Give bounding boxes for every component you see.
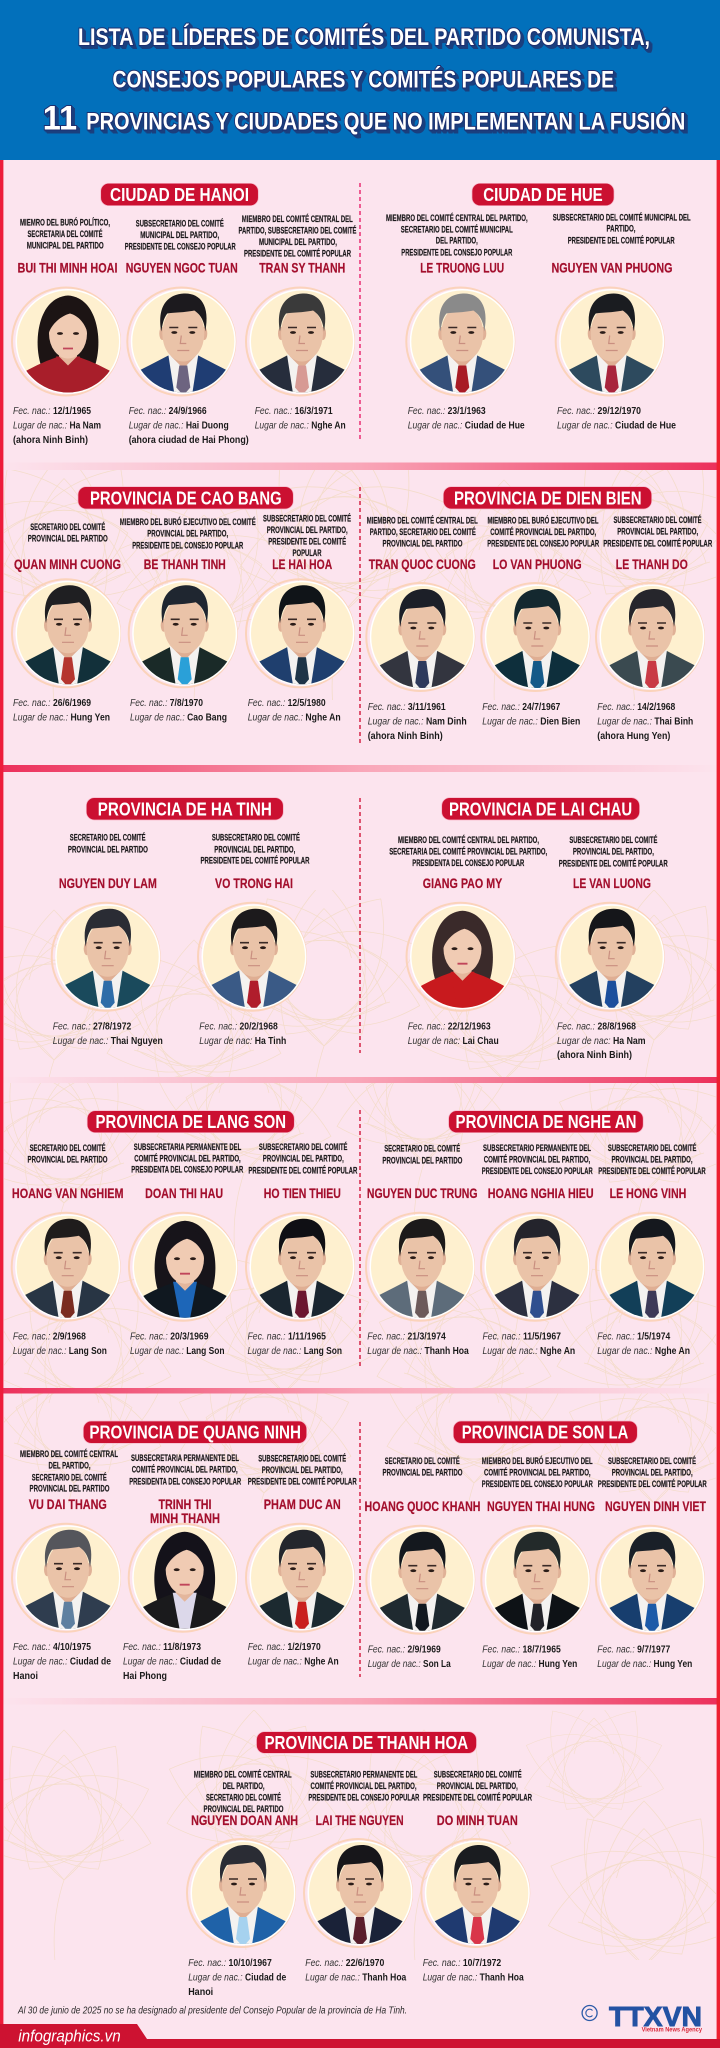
leader: Le Hai Hoa: Lugar de nac.: Nghe An: [248, 713, 341, 724]
portrait: [596, 583, 704, 691]
leader: Lai The Nguyen: LAI THE NGUYEN: [316, 1812, 404, 1828]
leader: Nguyen Ngoc Tuan: MUNICIPAL DEL PARTIDO,: [140, 230, 219, 241]
leader: Vo Trong Hai: [198, 832, 310, 1047]
portrait: [406, 288, 515, 396]
leader: Nguyen Dinh Viet: Lugar de nac.: Hung Yen: [597, 1659, 692, 1670]
leader: Tran Sy Thanh: Fec. nac.: 16/3/1971: [255, 406, 333, 417]
portrait: [129, 1213, 238, 1321]
panel: Provincia de Cao Bang: [12, 487, 354, 724]
leader: Le Van Luong: PROVINCIAL DEL PARTIDO,: [573, 847, 654, 858]
leader: Nguyen Doan Anh: [187, 1768, 298, 1998]
leader: Vu Dai Thang: VU DAI THANG: [29, 1496, 107, 1512]
leader: Nguyen Duc Trung: [366, 1143, 478, 1357]
leader: Le Hai Hoa: PRESIDENTE DEL COMITÉ: [268, 535, 347, 547]
leader: Nguyen Thai Hung: [481, 1455, 595, 1670]
leader: Nguyen Van Phuong: Fec. nac.: 29/12/1970: [557, 406, 641, 417]
leader: Le Thanh Do: Lugar de nac.: Thai Binh: [597, 716, 693, 727]
leader: Vu Dai Thang: DEL PARTIDO,: [48, 1461, 91, 1472]
leader: Trinh Thi Minh Thanh: COMITÉ PROVINCIAL DEL PARTIDO,: [132, 1464, 238, 1476]
panel: Ciudad de Hanoi: [12, 183, 357, 446]
leader: Le Truong Luu: PRESIDENTE DEL CONSEJO POPULAR: [401, 247, 512, 258]
panel: Provincia de Thanh Hoa: [187, 1732, 532, 1998]
leader: Doan Thi Hau: [129, 1142, 243, 1357]
leader: Bui Thi Minh Hoai: Fec. nac.: 12/1/1965: [13, 406, 91, 417]
leader: Lo Van Phuong: Lugar de nac.: Dien Bien: [482, 716, 580, 727]
heading: Ciudad de Hue: CIUDAD DE HUE: [483, 185, 603, 205]
leader: Giang Pao My: [389, 834, 547, 1047]
leader: Giang Pao My: Fec. nac.: 22/12/1963: [408, 1021, 491, 1032]
leader: Le Van Luong: Lugar de nac: Ha Nam: [557, 1036, 646, 1047]
leader: Le Hai Hoa: POPULAR: [292, 548, 322, 559]
portrait: [246, 1524, 354, 1632]
leader: Hoang Nghia Hieu: Fec. nac.: 11/5/1967: [482, 1331, 561, 1342]
leader: Le Hai Hoa: Fec. nac.: 12/5/1980: [248, 698, 326, 709]
panel: Provincia de Son La: [364, 1421, 707, 1670]
leader: Vo Trong Hai: VO TRONG HAI: [215, 875, 293, 891]
leader: Nguyen Ngoc Tuan: NGUYEN NGOC TUAN: [126, 260, 238, 276]
leader: Vo Trong Hai: PROVINCIAL DEL PARTIDO,: [214, 844, 296, 855]
leader: Le Thanh Do: Fec. nac.: 14/2/1968: [597, 702, 676, 713]
title: 11: [43, 100, 77, 138]
leader: Quan Minh Cuong: [12, 521, 121, 724]
leader: Pham Duc An: [246, 1452, 357, 1667]
leader: Giang Pao My: GIANG PAO MY: [423, 875, 503, 891]
heading: Provincia de Nghe An: PROVINCIA DE NGHE AN: [456, 1112, 636, 1132]
portrait: [12, 1524, 120, 1632]
leader: Le Hong Vinh: Fec. nac.: 1/5/1974: [597, 1331, 671, 1342]
portrait: [481, 1526, 590, 1634]
leader: Bui Thi Minh Hoai: MUNICIPAL DEL PARTIDO: [27, 240, 104, 252]
leader: Nguyen Dinh Viet: [596, 1455, 707, 1670]
leader: Hoang Van Nghiem: SECRETARIO DEL COMITÉ: [30, 1142, 106, 1154]
footer brand: infographics.vn: [18, 2028, 121, 2046]
leader: Nguyen Thai Hung: Fec. nac.: 18/7/1965: [482, 1644, 561, 1655]
leader: Nguyen Doan Anh: Lugar de nac.: Ciudad de: [188, 1972, 287, 1983]
leader: Trinh Thi Minh Thanh: PRESIDENTA DEL CONSEJO POPULAR: [129, 1476, 241, 1487]
leader: Lo Van Phuong: LO VAN PHUONG: [493, 556, 582, 572]
panel: Provincia de Quang Ninh: [12, 1421, 357, 1682]
leader: Tran Quoc Cuong: Lugar de nac.: Nam Dinh: [368, 716, 467, 727]
leader: Hoang Nghia Hieu: HOANG NGHIA HIEU: [488, 1185, 594, 1201]
logo: TTXVN: Vietnam News Agency: [642, 2028, 703, 2034]
leader: Nguyen Van Phuong: [552, 211, 691, 432]
leader: Hoang Nghia Hieu: COMITÉ PROVINCIAL DEL PARTIDO,: [484, 1154, 590, 1166]
lotus decoration, section 6: [4, 1710, 716, 1960]
leader: Lai The Nguyen: Fec. nac.: 22/6/1970: [305, 1958, 385, 1969]
leader: Trinh Thi Minh Thanh: SUBSECRETARIA PERMANENTE DEL: [131, 1453, 239, 1464]
leader: Nguyen Ngoc Tuan: (ahora ciudad de Hai Phong): [129, 435, 249, 446]
leader: Doan Thi Hau: Lugar de nac.: Lang Son: [130, 1346, 225, 1357]
leader: Be Thanh Tinh: BE THANH TINH: [144, 556, 226, 572]
leader: Vo Trong Hai: SUBSECRETARIO DEL COMITÉ: [212, 832, 300, 844]
leader: Nguyen Dinh Viet: Fec. nac.: 9/7/1977: [597, 1644, 671, 1655]
leader: Hoang Nghia Hieu: SUBSECRETARIO PERMANENTE DEL: [483, 1143, 591, 1154]
leader: Quan Minh Cuong: SECRETARIO DEL COMITÉ: [30, 521, 106, 533]
leader: Vo Trong Hai: Fec. nac.: 20/2/1968: [199, 1021, 278, 1032]
leader: Hoang Nghia Hieu: PRESIDENTE DEL CONSEJO POPULAR: [482, 1166, 593, 1177]
leader: Nguyen Doan Anh: DEL PARTIDO,: [223, 1781, 265, 1792]
portrait: [304, 1839, 412, 1947]
leader: Le Truong Luu: [386, 212, 528, 432]
leader: Lai The Nguyen: [304, 1769, 419, 1983]
leader: Ho Tien Thieu: PRESIDENTE DEL COMITÉ POPULAR: [248, 1164, 357, 1176]
title: [43, 23, 685, 138]
leader: Bui Thi Minh Hoai: BUI THI MINH HOAI: [18, 260, 118, 276]
footnote: Al 30 de junio de 2025 no se ha designado al presidente del Consejo Popular de la provincia de Ha Tinh.: [17, 2005, 407, 2016]
leader: Le Van Luong: [556, 834, 668, 1061]
leader: Tran Sy Thanh: PARTIDO, SUBSECRETARIO DEL COMITÉ: [238, 224, 357, 236]
leader: Nguyen Ngoc Tuan: [125, 218, 249, 446]
portrait: [421, 1839, 530, 1947]
leader: Giang Pao My: PRESIDENTA DEL CONSEJO POPULAR: [412, 858, 524, 869]
lotus decoration, section 2: [4, 470, 716, 700]
panel: Provincia de Dien Bien: [366, 487, 712, 742]
leader: Nguyen Duc Trung: SECRETARIO DEL COMITÉ: [384, 1143, 461, 1155]
leader: Vu Dai Thang: PROVINCIAL DEL PARTIDO: [30, 1484, 110, 1495]
leader: Le Truong Luu: MIEMBRO DEL COMITÉ CENTRAL DEL PARTIDO,: [386, 212, 528, 224]
leader: Nguyen Thai Hung: NGUYEN THAI HUNG: [487, 1498, 595, 1514]
heading: Provincia de Ha Tinh: PROVINCIA DE HA TINH: [98, 799, 272, 819]
leader: Nguyen Duc Trung: Fec. nac.: 21/3/1974: [367, 1331, 446, 1342]
leader: Tran Quoc Cuong: PROVINCIAL DEL PARTIDO: [382, 539, 463, 550]
leader: Le Hong Vinh: Lugar de nac.: Nghe An: [597, 1346, 690, 1357]
leader: Ho Tien Thieu: SUBSECRETARIO DEL COMITÉ: [259, 1141, 348, 1153]
portrait: [246, 1213, 354, 1321]
leader: Le Truong Luu: Lugar de nac.: Ciudad de Hue: [408, 420, 525, 432]
heading: Provincia de Thanh Hoa: PROVINCIA DE THANH HOA: [264, 1733, 468, 1753]
portrait: [596, 1213, 704, 1321]
leader: Le Van Luong: LE VAN LUONG: [573, 875, 651, 891]
leader: Pham Duc An: PHAM DUC AN: [264, 1496, 341, 1512]
leader: Trinh Thi Minh Thanh: [123, 1453, 241, 1682]
leader: Hoang Van Nghiem: Lugar de nac.: Lang Son: [13, 1346, 107, 1357]
leader: Nguyen Duy Lam: PROVINCIAL DEL PARTIDO: [68, 844, 148, 855]
leader: Be Thanh Tinh: PROVINCIAL DEL PARTIDO,: [147, 529, 228, 540]
leader: Do Minh Tuan: PRESIDENTE DEL COMITÉ POPULAR: [423, 1791, 532, 1803]
leader: Pham Duc An: PROVINCIAL DEL PARTIDO,: [262, 1465, 343, 1476]
leader: Le Thanh Do: (ahora Hung Yen): [597, 731, 670, 742]
leader: Le Van Luong: (ahora Ninh Binh): [557, 1050, 632, 1061]
portrait: [12, 288, 120, 396]
leader: Nguyen Thai Hung: Lugar de nac.: Hung Yen: [482, 1659, 577, 1670]
leader: Le Thanh Do: LE THANH DO: [616, 556, 688, 572]
leader: Giang Pao My: Lugar de nac: Lai Chau: [408, 1036, 499, 1047]
panel: Provincia de Nghe An: [366, 1111, 706, 1357]
heading: Ciudad de Hanoi: CIUDAD DE HANOI: [110, 185, 249, 205]
leader: Le Hai Hoa: [246, 512, 354, 724]
portrait: [52, 903, 160, 1011]
leader: Nguyen Van Phuong: NGUYEN VAN PHUONG: [552, 260, 673, 276]
lotus decoration, section 4: [4, 1083, 716, 1388]
leader: Do Minh Tuan: Fec. nac.: 10/7/1972: [423, 1958, 502, 1969]
leader: Vu Dai Thang: SECRETARIO DEL COMITÉ: [32, 1471, 107, 1483]
leader: Nguyen Doan Anh: Fec. nac.: 10/10/1967: [188, 1958, 272, 1969]
footer bar: [0, 2024, 720, 2048]
lotus decoration, section 3: [4, 890, 716, 1077]
leader: Doan Thi Hau: DOAN THI HAU: [145, 1185, 223, 1201]
leader: Tran Quoc Cuong: (ahora Ninh Binh): [368, 731, 443, 742]
portrait: [481, 583, 590, 691]
leader: Hoang Quoc Khanh: HOANG QUOC KHANH: [364, 1498, 480, 1514]
leader: Doan Thi Hau: SUBSECRETARIA PERMANENTE DEL: [134, 1142, 241, 1153]
leader: Hoang Nghia Hieu: [481, 1143, 594, 1357]
leader: Tran Sy Thanh: MIEMBRO DEL COMITÉ CENTRAL DEL: [242, 213, 353, 225]
leader: Le Truong Luu: DEL PARTIDO,: [436, 236, 478, 247]
leader: Le Hong Vinh: [596, 1142, 706, 1357]
leader: Ho Tien Thieu: [246, 1141, 357, 1357]
leader: Giang Pao My: MIEMBRO DEL COMITÉ CENTRAL DEL PARTIDO,: [398, 834, 539, 846]
leader: Doan Thi Hau: PRESIDENTA DEL CONSEJO POPULAR: [131, 1165, 243, 1176]
heading: Provincia de Lai Chau: PROVINCIA DE LAI CHAU: [449, 799, 632, 819]
leader: Do Minh Tuan: PROVINCIAL DEL PARTIDO,: [437, 1781, 518, 1792]
leader: Nguyen Doan Anh: PROVINCIAL DEL PARTIDO: [204, 1804, 284, 1815]
leader: Bui Thi Minh Hoai: SECRETARIA DEL COMITÉ: [28, 228, 103, 240]
leader: Quan Minh Cuong: Fec. nac.: 26/6/1969: [13, 698, 91, 709]
leader: Do Minh Tuan: SUBSECRETARIO DEL COMITÉ: [434, 1768, 522, 1780]
leader: Vu Dai Thang: Fec. nac.: 4/10/1975: [13, 1642, 91, 1653]
leader: Be Thanh Tinh: [120, 516, 256, 724]
leader: Nguyen Ngoc Tuan: SUBSECRETARIO DEL COMITÉ: [136, 218, 224, 230]
portrait: [366, 1213, 474, 1321]
title: CONSEJOS POPULARES Y COMITÉS POPULARES DE: [112, 66, 614, 94]
portrait: [246, 288, 354, 396]
leader: Be Thanh Tinh: Fec. nac.: 7/8/1970: [130, 698, 203, 709]
portrait: [127, 288, 236, 396]
leader: Hoang Van Nghiem: [12, 1142, 124, 1357]
leader: Lai The Nguyen: COMITÉ PROVINCIAL DEL PARTIDO,: [310, 1780, 417, 1792]
leader: Tran Quoc Cuong: Fec. nac.: 3/11/1961: [368, 702, 446, 713]
leader: Be Thanh Tinh: MIEMBRO DEL BURÓ EJECUTIVO DEL COMITÉ: [120, 516, 256, 528]
leader: Tran Quoc Cuong: TRAN QUOC CUONG: [369, 556, 476, 572]
leader: Hoang Quoc Khanh: Lugar de nac.: Son La: [368, 1659, 451, 1670]
leader: Nguyen Thai Hung: PRESIDENTE DEL CONSEJO POPULAR: [482, 1479, 593, 1490]
leader: Nguyen Ngoc Tuan: PRESIDENTE DEL CONSEJO POPULAR: [125, 242, 236, 252]
heading: Provincia de Lang Son: PROVINCIA DE LANG SON: [96, 1112, 286, 1132]
center dashed separators: [359, 183, 361, 1677]
leader: Pham Duc An: Fec. nac.: 1/2/1970: [248, 1642, 321, 1653]
leader: Nguyen Doan Anh: MIEMBRO DEL COMITÉ CENTRAL: [194, 1768, 292, 1780]
leader: Nguyen Duc Trung: PROVINCIAL DEL PARTIDO: [382, 1155, 463, 1166]
leader: Lo Van Phuong: [481, 514, 599, 727]
leader: Le Hai Hoa: SUBSECRETARIO DEL COMITÉ: [263, 512, 351, 524]
leader: Nguyen Duy Lam: Fec. nac.: 27/8/1972: [53, 1021, 132, 1032]
portrait: [556, 903, 664, 1011]
panel: Provincia de Lai Chau: [389, 798, 668, 1061]
panel: Provincia de Lang Son: [12, 1111, 357, 1357]
heading: Provincia de Quang Ninh: PROVINCIA DE QUANG NINH: [89, 1423, 301, 1443]
leader: Bui Thi Minh Hoai: (ahora Ninh Binh): [13, 435, 88, 446]
leader: Nguyen Duc Trung: Lugar de nac.: Thanh Hoa: [367, 1346, 469, 1357]
leader: Nguyen Duy Lam: SECRETARIO DEL COMITÉ: [70, 832, 146, 844]
leader: Trinh Thi Minh Thanh: Fec. nac.: 11/8/1973: [123, 1642, 201, 1653]
leader: Ho Tien Thieu: PROVINCIAL DEL PARTIDO,: [263, 1154, 344, 1165]
leader: Bui Thi Minh Hoai: Lugar de nac.: Ha Nam: [13, 420, 101, 432]
leader: Hoang Quoc Khanh: [364, 1455, 480, 1670]
leader: Le Truong Luu: SECRETARIO DEL COMITÉ MUNICIPAL: [401, 223, 513, 235]
leader: Le Hai Hoa: PROVINCIAL DEL PARTIDO,: [267, 525, 348, 536]
leader: Pham Duc An: Lugar de nac.: Nghe An: [248, 1656, 339, 1667]
portrait: [187, 1839, 296, 1947]
leader: Vu Dai Thang: Hanoi: [13, 1671, 38, 1682]
portrait: [556, 288, 664, 396]
leader: Le Van Luong: SUBSECRETARIO DEL COMITÉ: [569, 834, 658, 846]
leader: Hoang Quoc Khanh: SECRETARIO DEL COMITÉ: [385, 1455, 460, 1467]
leader: Tran Sy Thanh: [238, 213, 357, 432]
panel: Provincia de Ha Tinh: [52, 798, 310, 1047]
portrait: [366, 583, 475, 691]
leader: Nguyen Duy Lam: Lugar de nac.: Thai Nguyen: [53, 1036, 163, 1047]
leader: Lo Van Phuong: MIEMBRO DEL BURÓ EJECUTIVO DEL: [488, 514, 599, 526]
portrait: [12, 1213, 120, 1321]
leader: Tran Quoc Cuong: PARTIDO, SECRETARIO DEL COMITÉ: [370, 526, 476, 538]
leader: Vu Dai Thang: [12, 1448, 120, 1682]
leader: Le Truong Luu: LE TRUONG LUU: [420, 260, 504, 276]
header banner: [0, 0, 720, 160]
leader: Tran Sy Thanh: TRAN SY THANH: [259, 260, 345, 276]
leader: Tran Sy Thanh: Lugar de nac.: Nghe An: [255, 420, 346, 432]
lotus decoration, section 5: [4, 1394, 716, 1503]
leader: Pham Duc An: PRESIDENTE DEL COMITÉ POPULAR: [248, 1475, 357, 1487]
leader: Nguyen Duy Lam: NGUYEN DUY LAM: [59, 875, 157, 891]
portrait: [366, 1526, 475, 1634]
leader: Hoang Quoc Khanh: PROVINCIAL DEL PARTIDO: [382, 1467, 463, 1478]
portrait: [129, 579, 237, 687]
leader: Quan Minh Cuong: PROVINCIAL DEL PARTIDO: [28, 533, 108, 544]
leader: Be Thanh Tinh: PRESIDENTE DEL CONSEJO POPULAR: [132, 540, 243, 551]
leader: Nguyen Duc Trung: NGUYEN DUC TRUNG: [367, 1185, 478, 1201]
leader: Trinh Thi Minh Thanh: TRINH THI: [158, 1496, 212, 1512]
leader: Hoang Van Nghiem: PROVINCIAL DEL PARTIDO: [28, 1154, 108, 1165]
leader: Pham Duc An: SUBSECRETARIO DEL COMITÉ: [258, 1452, 347, 1464]
leader: Ho Tien Thieu: HO TIEN THIEU: [264, 1185, 341, 1201]
leader: Tran Quoc Cuong: MIEMBRO DEL COMITÉ CENTRAL DEL: [367, 514, 478, 526]
leader: Bui Thi Minh Hoai: MIEMRO DEL BURÓ POLÍTICO,: [20, 216, 110, 228]
leader: Le Truong Luu: Fec. nac.: 23/1/1963: [408, 406, 486, 417]
leader: Lo Van Phuong: PRESIDENTE DEL CONSEJO POPULAR: [487, 539, 599, 550]
portrait: [481, 1213, 590, 1321]
leader: Trinh Thi Minh Thanh: Hai Phong: [123, 1671, 167, 1682]
leader: Quan Minh Cuong: QUAN MINH CUONG: [14, 556, 121, 572]
portrait: [129, 1524, 237, 1632]
portrait: [198, 903, 306, 1011]
leader: Nguyen Duy Lam: [52, 832, 163, 1047]
logo: TTXVN: TTXVN: [609, 2001, 702, 2032]
copyright icon: [582, 2006, 597, 2020]
portrait: [12, 579, 120, 687]
leader: Tran Quoc Cuong: [366, 514, 478, 742]
leader: Le Hai Hoa: LE HAI HOA: [272, 556, 332, 572]
leader: Ho Tien Thieu: Fec. nac.: 1/11/1965: [248, 1331, 326, 1342]
leader: Nguyen Thai Hung: COMITÉ PROVINCIAL DEL PARTIDO,: [484, 1466, 591, 1478]
leader: Nguyen Van Phuong: PARTIDO,: [606, 224, 636, 235]
leader: Nguyen Ngoc Tuan: Fec. nac.: 24/9/1966: [129, 406, 207, 417]
leader: Hoang Van Nghiem: HOANG VAN NGHIEM: [12, 1185, 124, 1201]
leader: Nguyen Doan Anh: SECRETARIO DEL COMITÉ: [206, 1791, 281, 1803]
portrait: [596, 1526, 704, 1634]
leader: Trinh Thi Minh Thanh: MINH THANH: [150, 1510, 220, 1526]
leader: Lo Van Phuong: Fec. nac.: 24/7/1967: [482, 702, 561, 713]
leader: Le Thanh Do: [596, 514, 712, 742]
leader: Do Minh Tuan: DO MINH TUAN: [437, 1812, 518, 1828]
leader: Ho Tien Thieu: Lugar de nac.: Lang Son: [248, 1346, 342, 1357]
leader: Hoang Nghia Hieu: Lugar de nac.: Nghe An: [482, 1346, 575, 1357]
leader: Bui Thi Minh Hoai: [12, 216, 120, 446]
leader: Giang Pao My: SECRETARIA DEL COMITÉ PROVINCIAL DEL PARTIDO,: [389, 845, 547, 857]
leader: Do Minh Tuan: [421, 1768, 532, 1983]
leader: Nguyen Doan Anh: Hanoi: [188, 1987, 213, 1998]
section divider bands: [0, 462, 720, 1704]
leader: Doan Thi Hau: Fec. nac.: 20/3/1969: [130, 1331, 209, 1342]
leader: Be Thanh Tinh: Lugar de nac.: Cao Bang: [130, 713, 227, 724]
panel: Ciudad de Hue: [386, 183, 691, 432]
heading: Provincia de Son La: PROVINCIA DE SON LA: [462, 1423, 628, 1443]
leader: Le Van Luong: Fec. nac.: 28/8/1968: [557, 1021, 636, 1032]
leader: Lai The Nguyen: Lugar de nac.: Thanh Hoa: [305, 1972, 407, 1983]
leader: Le Hong Vinh: LE HONG VINH: [610, 1185, 686, 1201]
leader: Vu Dai Thang: MIEMBRO DEL COMITÉ CENTRAL: [20, 1448, 118, 1460]
portrait: [246, 579, 354, 687]
leader: Trinh Thi Minh Thanh: Lugar de nac.: Ciudad de: [123, 1656, 221, 1667]
heading: Provincia de Dien Bien: PROVINCIA DE DIEN BIEN: [454, 488, 642, 508]
leader: Nguyen Thai Hung: MIEMBRO DEL BURÓ EJECUTIVO DEL: [482, 1455, 593, 1467]
leader: Vu Dai Thang: Lugar de nac.: Ciudad de: [13, 1656, 111, 1667]
leader: Lai The Nguyen: SUBSECRETARIO PERMANENTE DEL: [310, 1769, 417, 1780]
leader: Lo Van Phuong: COMITÉ PROVINCIAL DEL PARTIDO,: [490, 526, 596, 538]
leader: Quan Minh Cuong: Lugar de nac.: Hung Yen: [13, 713, 110, 724]
leader: Doan Thi Hau: COMITÉ PROVINCIAL DEL PARTIDO,: [134, 1152, 241, 1164]
leader: Tran Sy Thanh: MUNICIPAL DEL PARTIDO,: [259, 237, 337, 248]
leader: Hoang Van Nghiem: Fec. nac.: 2/9/1968: [13, 1331, 86, 1342]
leader: Do Minh Tuan: Lugar de nac.: Thanh Hoa: [423, 1972, 524, 1983]
heading: Provincia de Cao Bang: PROVINCIA DE CAO BANG: [90, 488, 282, 508]
leader: Vo Trong Hai: PRESIDENTE DEL COMITÉ POPULAR: [200, 855, 310, 867]
leader: Tran Sy Thanh: PRESIDENTE DEL COMITÉ POPULAR: [244, 248, 351, 260]
leader: Nguyen Van Phuong: Lugar de nac.: Ciudad de Hue: [557, 420, 676, 432]
leader: Nguyen Ngoc Tuan: Lugar de nac.: Hai Duong: [129, 420, 229, 432]
leader: Nguyen Doan Anh: NGUYEN DOAN ANH: [191, 1812, 298, 1828]
leader: Vo Trong Hai: Lugar de nac: Ha Tinh: [199, 1036, 286, 1047]
leader: Hoang Quoc Khanh: Fec. nac.: 2/9/1969: [368, 1644, 441, 1655]
portrait: [406, 903, 515, 1011]
leader: Lai The Nguyen: PRESIDENTE DEL CONSEJO POPULAR: [308, 1792, 419, 1803]
